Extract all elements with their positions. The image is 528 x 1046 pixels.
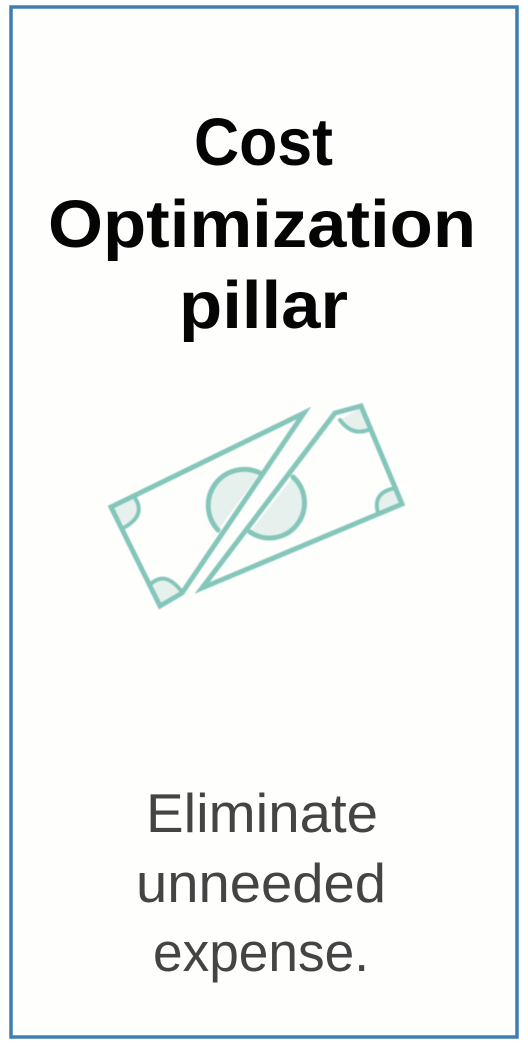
left bill half medallion (208, 469, 260, 530)
description text (136, 782, 386, 983)
heading: Optimization (48, 187, 476, 262)
corner arcs (125, 420, 396, 592)
heading: Cost (194, 105, 333, 180)
left bill half outline (111, 413, 304, 606)
heading: pillar (179, 268, 348, 343)
medallion arcs (208, 469, 304, 538)
description text: expense. (153, 921, 369, 983)
corner fills (111, 407, 402, 606)
right bill half outline (202, 406, 402, 588)
heading (48, 105, 476, 343)
right bill half medallion (250, 477, 304, 538)
description text: Eliminate (146, 782, 378, 844)
description text: unneeded (136, 852, 386, 914)
icon: dollar bill split in two (111, 406, 402, 606)
